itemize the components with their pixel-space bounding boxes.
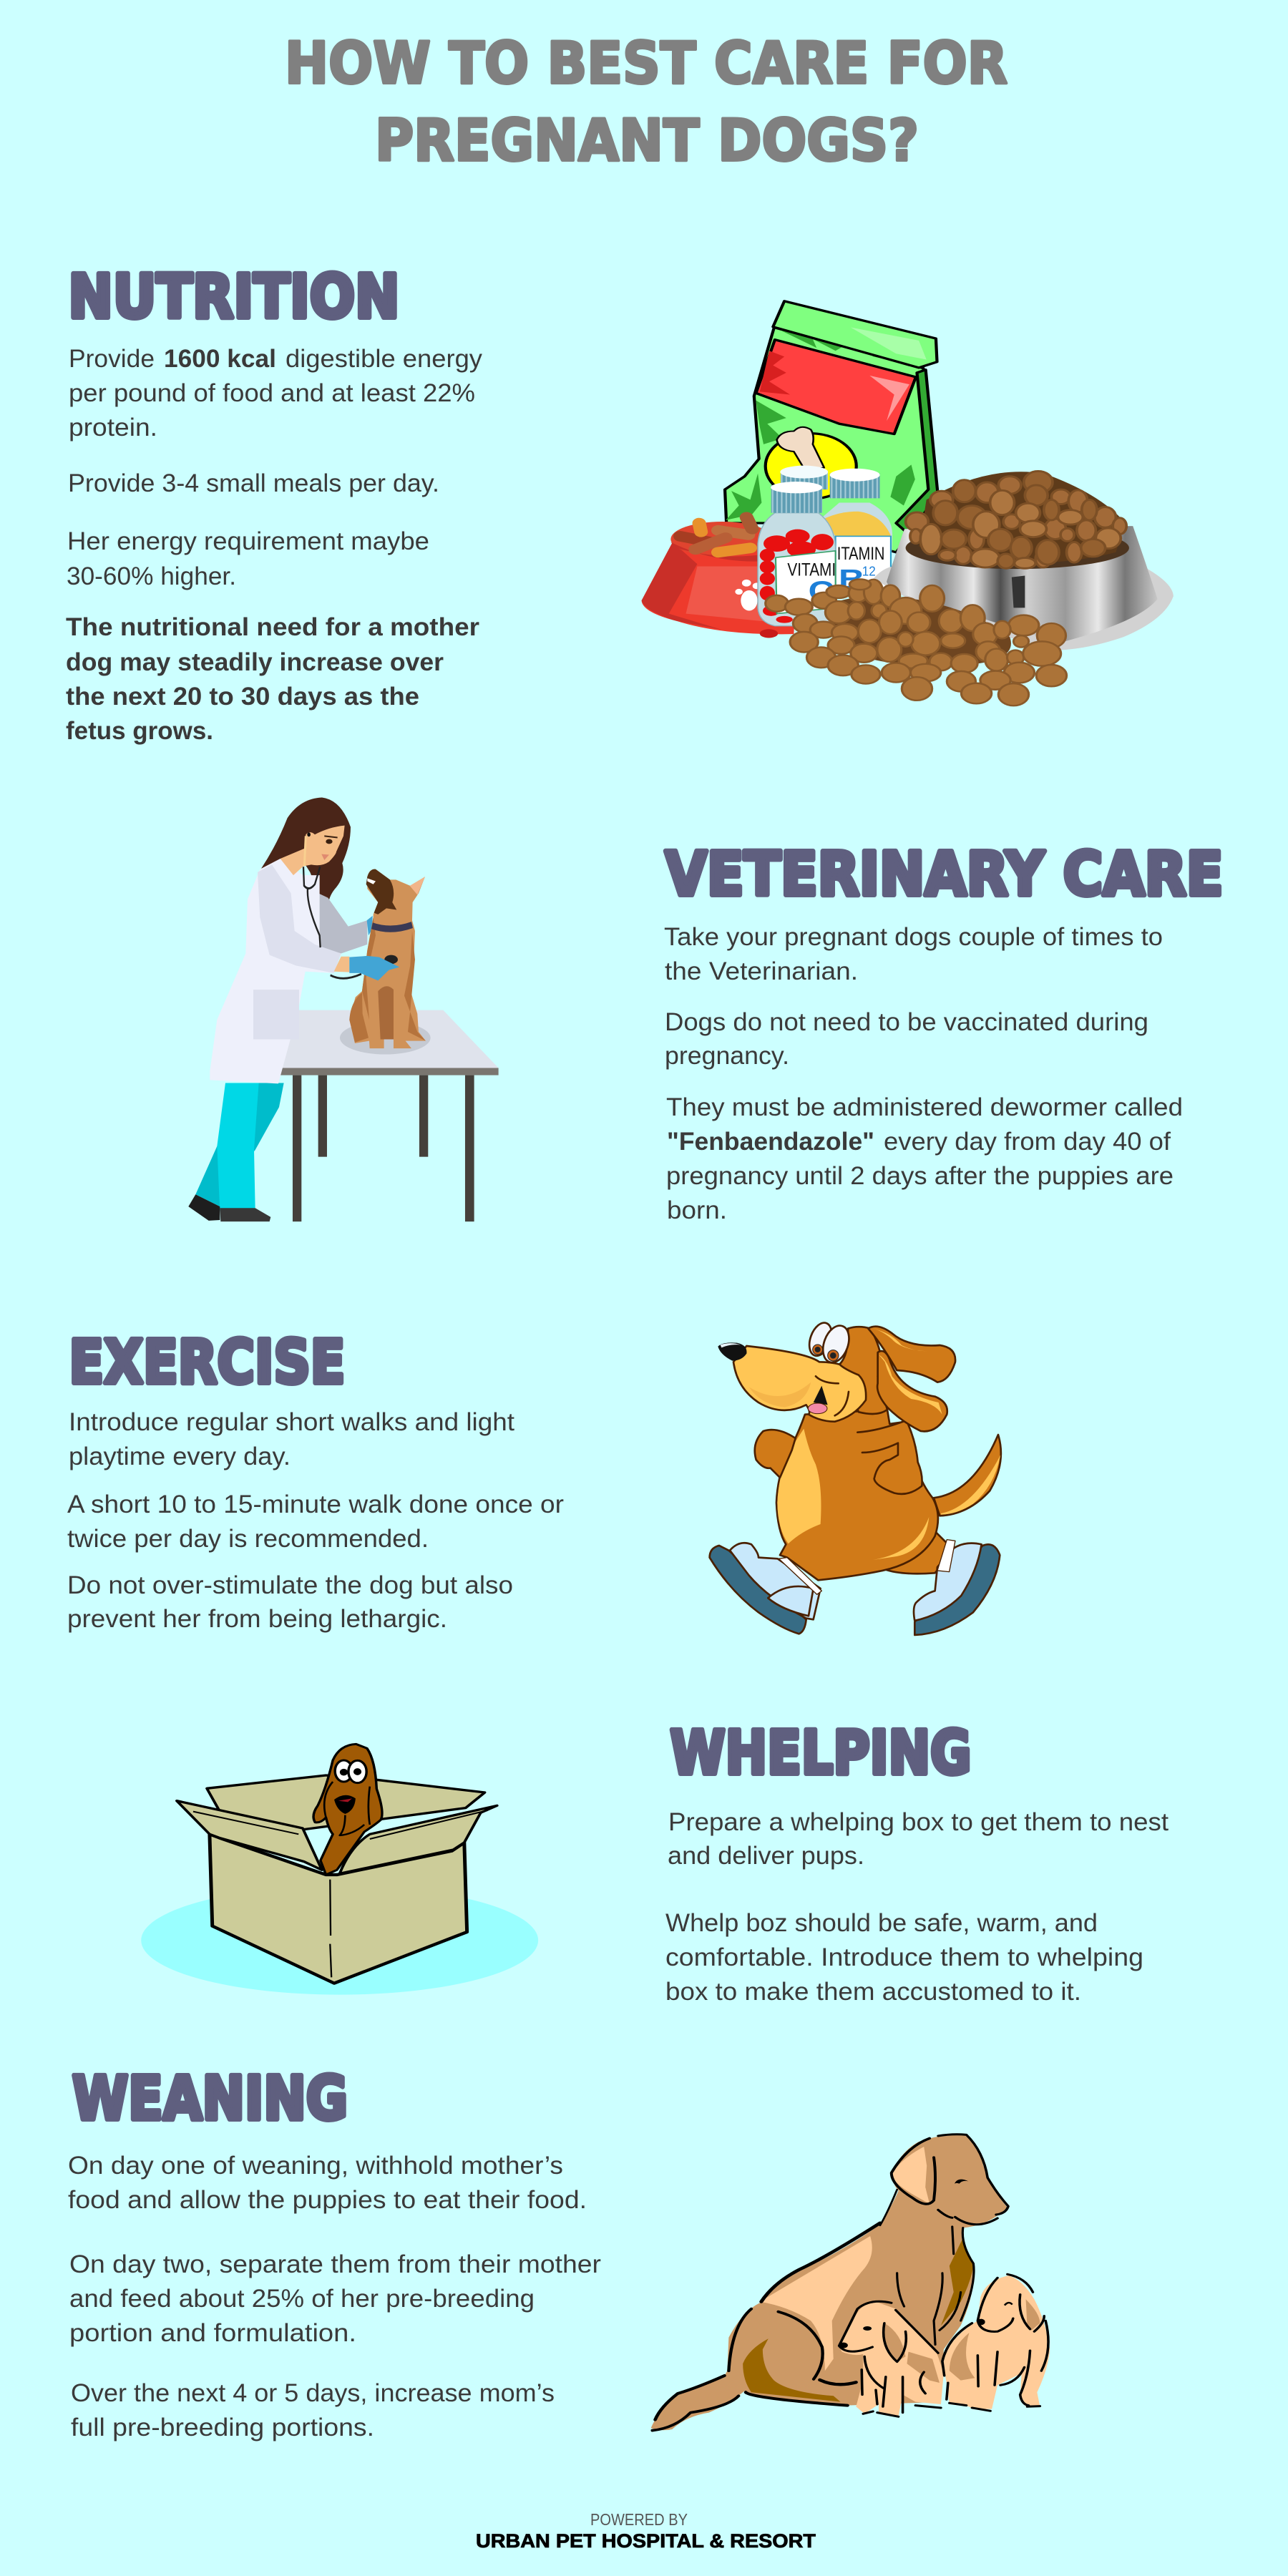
title: HOW TO BEST CARE FOR [285,30,1008,97]
icon: back vitamin bottle [780,466,828,489]
dog on table [349,869,426,1048]
illustration: dog food bag, vitamins and bowls [642,301,1174,706]
text block: nutrition facts [67,345,483,590]
icon: green food bag [725,301,939,552]
icon: vitamin B12 bottle [822,469,892,595]
footer: powered by: POWERED BY [590,2510,688,2529]
panel: veterinary care [664,839,1224,1224]
text block: whelping: box to make them accustomed to it. [665,1978,1081,2006]
icon: vitamin C bottle: C [809,575,834,607]
icon: silver bowl [874,526,1174,650]
text block: whelping: Prepare a whelping box to get them to nest [668,1808,1169,1836]
heading: exercise: EXERCISE [69,1327,345,1397]
panel: whelping [665,1717,1169,2006]
panel: nutrition [66,262,483,745]
illustration: puppy in a whelping box [141,1744,538,1995]
illustration: mother dog with two puppies [651,2135,1050,2431]
text block: veterinary care [664,923,1183,1224]
text block: weaning: Over the next 4 or 5 days, increase mom’s [71,2379,555,2407]
text block: exercise: prevent her from being lethargic. [67,1605,447,1633]
tail [934,1435,1001,1516]
veterinarian [188,798,373,1221]
text block: veterinary care: They must be administered dewormer called [666,1093,1183,1121]
text block: nutrition highlight [66,613,479,745]
text block: nutrition facts: Provide [69,345,155,373]
kibble pile in bowl [906,471,1126,568]
box body [210,1834,467,1984]
right sneaker [914,1540,1000,1635]
text block: nutrition highlight: dog may steadily increase over [66,648,444,676]
head [718,1319,887,1422]
icon: vitamin B12 bottle: B [839,563,865,595]
text block: whelping [665,1808,1169,2006]
text block: nutrition facts: per pound of food and at least 22% [69,379,475,407]
table [278,1010,499,1221]
text block: weaning [68,2152,601,2441]
text block: nutrition highlight: fetus grows. [66,717,213,745]
left sneaker [710,1543,821,1634]
footer: powered by: URBAN PET HOSPITAL & RESORT [476,2530,816,2552]
text block: veterinary care: every day from day 40 of [884,1128,1171,1156]
footer: powered by [476,2510,816,2552]
text block: exercise: twice per day is recommended. [67,1525,429,1553]
text block: veterinary care: Take your pregnant dogs couple of times to [664,923,1163,951]
text block: exercise: Do not over-stimulate the dog but also [67,1571,513,1599]
text block: veterinary care: Dogs do not need to be vaccinated during [665,1008,1148,1036]
text block: nutrition facts: 30-60% higher. [67,562,236,590]
illustration: veterinarian examining dog on table [188,798,499,1221]
text block: whelping: and deliver pups. [668,1842,864,1870]
text block: exercise: A short 10 to 15-minute walk done once or [67,1491,564,1518]
text block: exercise: playtime every day. [69,1443,291,1470]
heading: whelping: WHELPING [670,1717,972,1787]
text block: weaning: food and allow the puppies to eat their food. [68,2186,587,2214]
icon: paw print [735,580,761,611]
heading: nutrition: NUTRITION [69,262,399,332]
text block: nutrition highlight: The nutritional need for a mother [66,613,479,641]
text block: weaning: portion and formulation. [69,2319,356,2347]
puppy right [942,2274,1050,2411]
icon: red bowl with treats [642,517,798,634]
heading: veterinary care: VETERINARY CARE [665,839,1224,909]
text block: nutrition facts: protein. [69,414,157,441]
panel: weaning [68,2064,601,2441]
text block: veterinary care: "Fenbaendazole" [667,1128,874,1156]
text block: nutrition facts: Her energy requirement maybe [67,527,429,555]
text block: nutrition facts: digestible energy [286,345,483,373]
text block: exercise [67,1408,564,1633]
text block: whelping: comfortable. Introduce them to whelping [665,1943,1143,1971]
text block: veterinary care: born. [667,1196,727,1224]
icon: vitamin C bottle [758,482,836,638]
text block: nutrition facts: 1600 kcal [164,345,276,373]
icon: vitamin B12 bottle: ITAMIN [837,544,884,564]
mother dog [651,2135,1008,2431]
text block: veterinary care: the Veterinarian. [665,957,858,985]
puppy left [839,2301,944,2416]
text block: nutrition facts: Provide 3-4 small meals per day. [68,469,439,497]
puppy [313,1744,382,1875]
loose kibble [766,579,1067,706]
text block: weaning: and feed about 25% of her pre-breeding [69,2285,535,2313]
icon: vitamin C bottle: VITAMI [787,560,836,580]
text block: whelping: Whelp boz should be safe, warm, and [665,1909,1098,1937]
title [285,30,1008,174]
left paw [755,1430,796,1478]
text block: weaning: On day one of weaning, withhold mother’s [68,2152,563,2180]
shadow ellipse [141,1886,538,1995]
icon: vitamin B12 bottle: 12 [862,563,876,579]
illustration: walking cartoon dog in sneakers [710,1319,1001,1635]
title: PREGNANT DOGS? [375,107,919,174]
body [776,1410,954,1580]
text block: nutrition highlight: the next 20 to 30 days as the [66,683,419,711]
right arm [857,1420,922,1494]
mother dog eye [955,2180,968,2184]
box front flaps [177,1801,497,1977]
heading: weaning: WEANING [72,2064,348,2134]
text block: veterinary care: pregnancy until 2 days after the puppies are [666,1162,1174,1190]
panel: exercise [67,1327,564,1633]
box back flaps [207,1775,485,1830]
text block: weaning: full pre-breeding portions. [71,2414,374,2441]
text block: veterinary care: pregnancy. [665,1042,789,1070]
text block: weaning: On day two, separate them from their mother [69,2250,601,2278]
text block: exercise: Introduce regular short walks and light [69,1408,514,1436]
ears [868,1327,955,1431]
